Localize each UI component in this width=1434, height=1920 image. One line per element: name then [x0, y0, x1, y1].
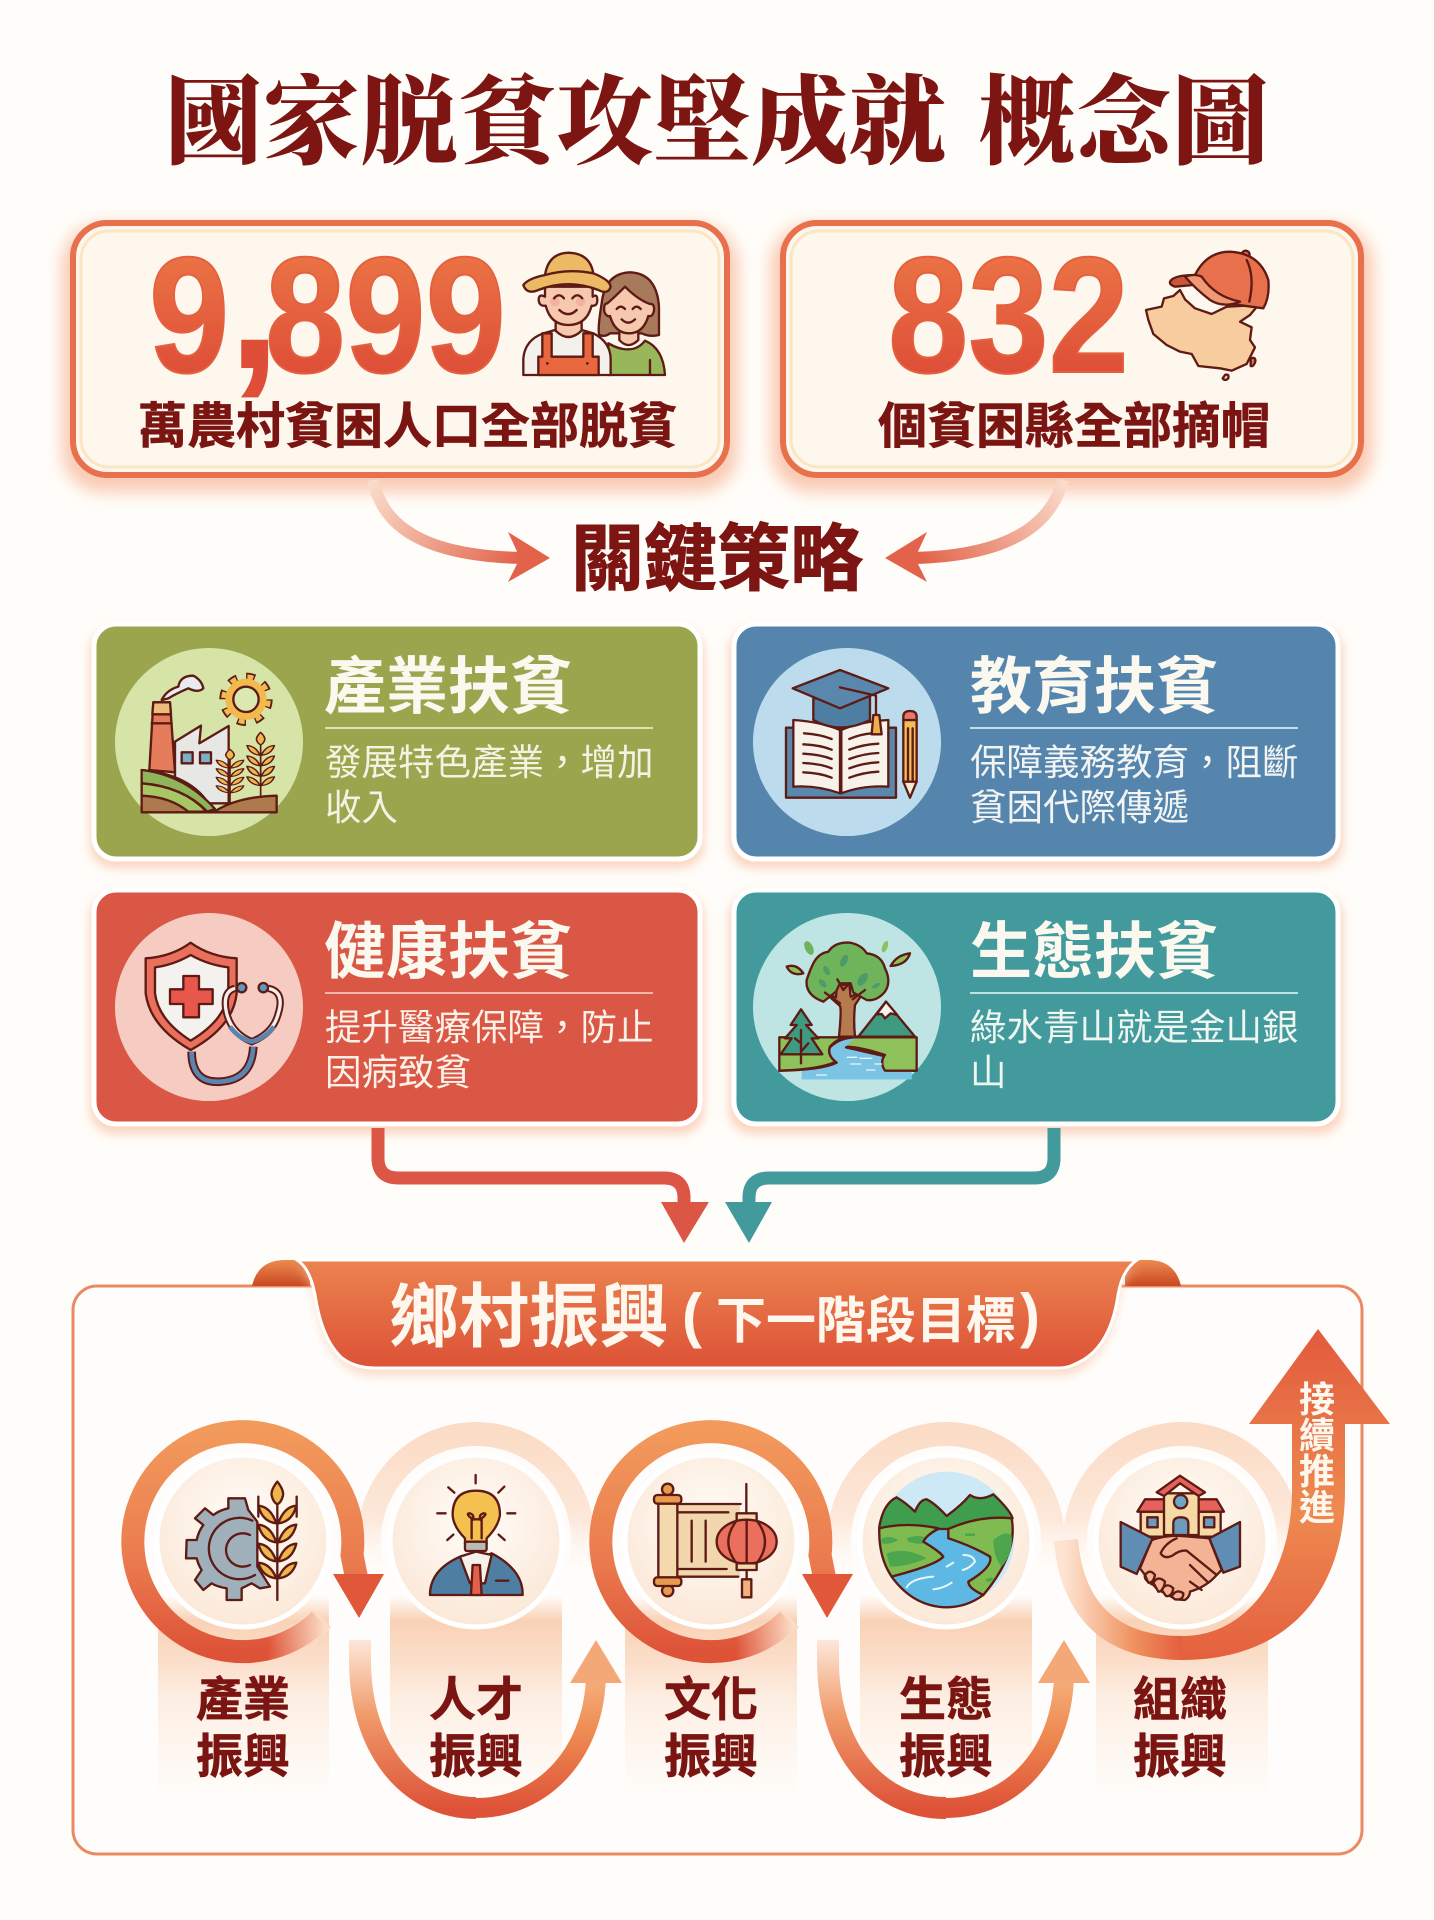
stat number: 9,899: , — [228, 197, 281, 409]
panel: rural revitalization — [73, 1260, 1390, 1854]
card heading: 生態扶貧 — [970, 918, 1218, 987]
card description: 因病致貧 — [325, 1052, 471, 1093]
flow arrow: U-curve under talent — [360, 1640, 622, 1808]
title: 國家脱貧攻堅成就 — [165, 70, 947, 177]
stat number: 9,899 — [149, 197, 506, 409]
label: 人才 — [429, 1673, 523, 1726]
icon: gear and wheat — [186, 1482, 297, 1600]
icon: farmers — [523, 253, 665, 375]
arrow: teal flow to rural revitalization — [725, 1128, 1054, 1243]
divider — [325, 992, 653, 994]
step: organization revitalization — [1096, 1455, 1268, 1783]
icon: shield and stethoscope — [115, 913, 303, 1101]
stat number: 9,899: 899 — [265, 223, 506, 407]
icon: cap over China map — [1146, 251, 1269, 380]
panel: 9,899 stat — [62, 197, 738, 492]
divider — [970, 992, 1298, 994]
label: 振興 — [196, 1730, 290, 1783]
card description: 綠水青山就是金山銀 — [970, 1007, 1298, 1048]
flow arrow: continuing upward — [1066, 1329, 1390, 1660]
arrow: right stat to key strategies — [885, 480, 1063, 582]
banner subtitle: ) — [1020, 1282, 1040, 1349]
banner subtitle: 下一階段目標 — [716, 1293, 1016, 1349]
stat label: 萬農村貧困人口全部脱貧 — [138, 400, 677, 454]
card description: 山 — [970, 1052, 1006, 1093]
stat number: 832: 832 — [888, 223, 1129, 407]
panel: education poverty relief — [729, 624, 1343, 868]
panel: ecology poverty relief — [729, 890, 1343, 1134]
stat label: 個貧困縣全部摘帽 — [878, 400, 1270, 454]
arrow: left stat to key strategies — [373, 480, 550, 582]
heading: key strategies: 關鍵策略 — [571, 519, 863, 600]
banner: rural revitalization next stage — [252, 1260, 1181, 1376]
stat number: 9,899: 9 — [149, 223, 229, 407]
card heading: 健康扶貧 — [324, 918, 572, 987]
panel: 832 stat — [771, 223, 1373, 492]
step: talent revitalization — [390, 1455, 562, 1783]
flow: light rings behind circles — [158, 1434, 1289, 1810]
icon: light bulb and suit — [430, 1475, 523, 1595]
arrow: red flow to rural revitalization — [378, 1128, 709, 1243]
icon: book, cap and pencil — [753, 648, 941, 836]
icon: tree, mountain and river — [753, 913, 941, 1101]
card description: 提升醫療保障，防止 — [325, 1007, 654, 1048]
label: 振興 — [899, 1730, 993, 1783]
label: 文化 — [664, 1673, 758, 1726]
card heading: 教育扶貧 — [970, 653, 1218, 722]
icon: house and handshake — [1121, 1476, 1240, 1600]
label: 振興 — [1133, 1730, 1227, 1783]
card description: 貧困代際傳遞 — [970, 787, 1189, 828]
panel: industry poverty relief — [90, 624, 704, 868]
label: 產業 — [196, 1673, 290, 1726]
icon: river valley — [879, 1472, 1014, 1607]
flow arrow: ring around culture — [601, 1432, 853, 1652]
card description: 保障義務教育，阻斷 — [970, 742, 1298, 783]
icon: scroll and lantern — [654, 1484, 777, 1597]
divider — [970, 727, 1298, 729]
step: culture revitalization — [625, 1455, 797, 1783]
label: 振興 — [664, 1730, 758, 1783]
card description: 收入 — [325, 787, 398, 828]
flow arrow: U-curve under ecology — [828, 1640, 1090, 1808]
label: 生態 — [899, 1673, 993, 1726]
card description: 發展特色產業，增加 — [325, 742, 654, 783]
arrow text: 接續推進 — [1299, 1379, 1335, 1528]
card heading: 產業扶貧 — [324, 653, 572, 722]
divider — [325, 727, 653, 729]
flow arrow: ring around industry — [133, 1432, 384, 1652]
label: 振興 — [429, 1730, 523, 1783]
panel: health poverty relief — [90, 890, 704, 1134]
title: 概念圖 — [978, 70, 1269, 177]
banner subtitle: ( — [682, 1282, 702, 1349]
step: ecology revitalization — [860, 1455, 1032, 1783]
label: 組織 — [1133, 1673, 1227, 1726]
icon: factory and wheat — [115, 648, 303, 836]
banner title: 鄉村振興 — [389, 1278, 669, 1356]
step: industry revitalization — [157, 1455, 329, 1783]
